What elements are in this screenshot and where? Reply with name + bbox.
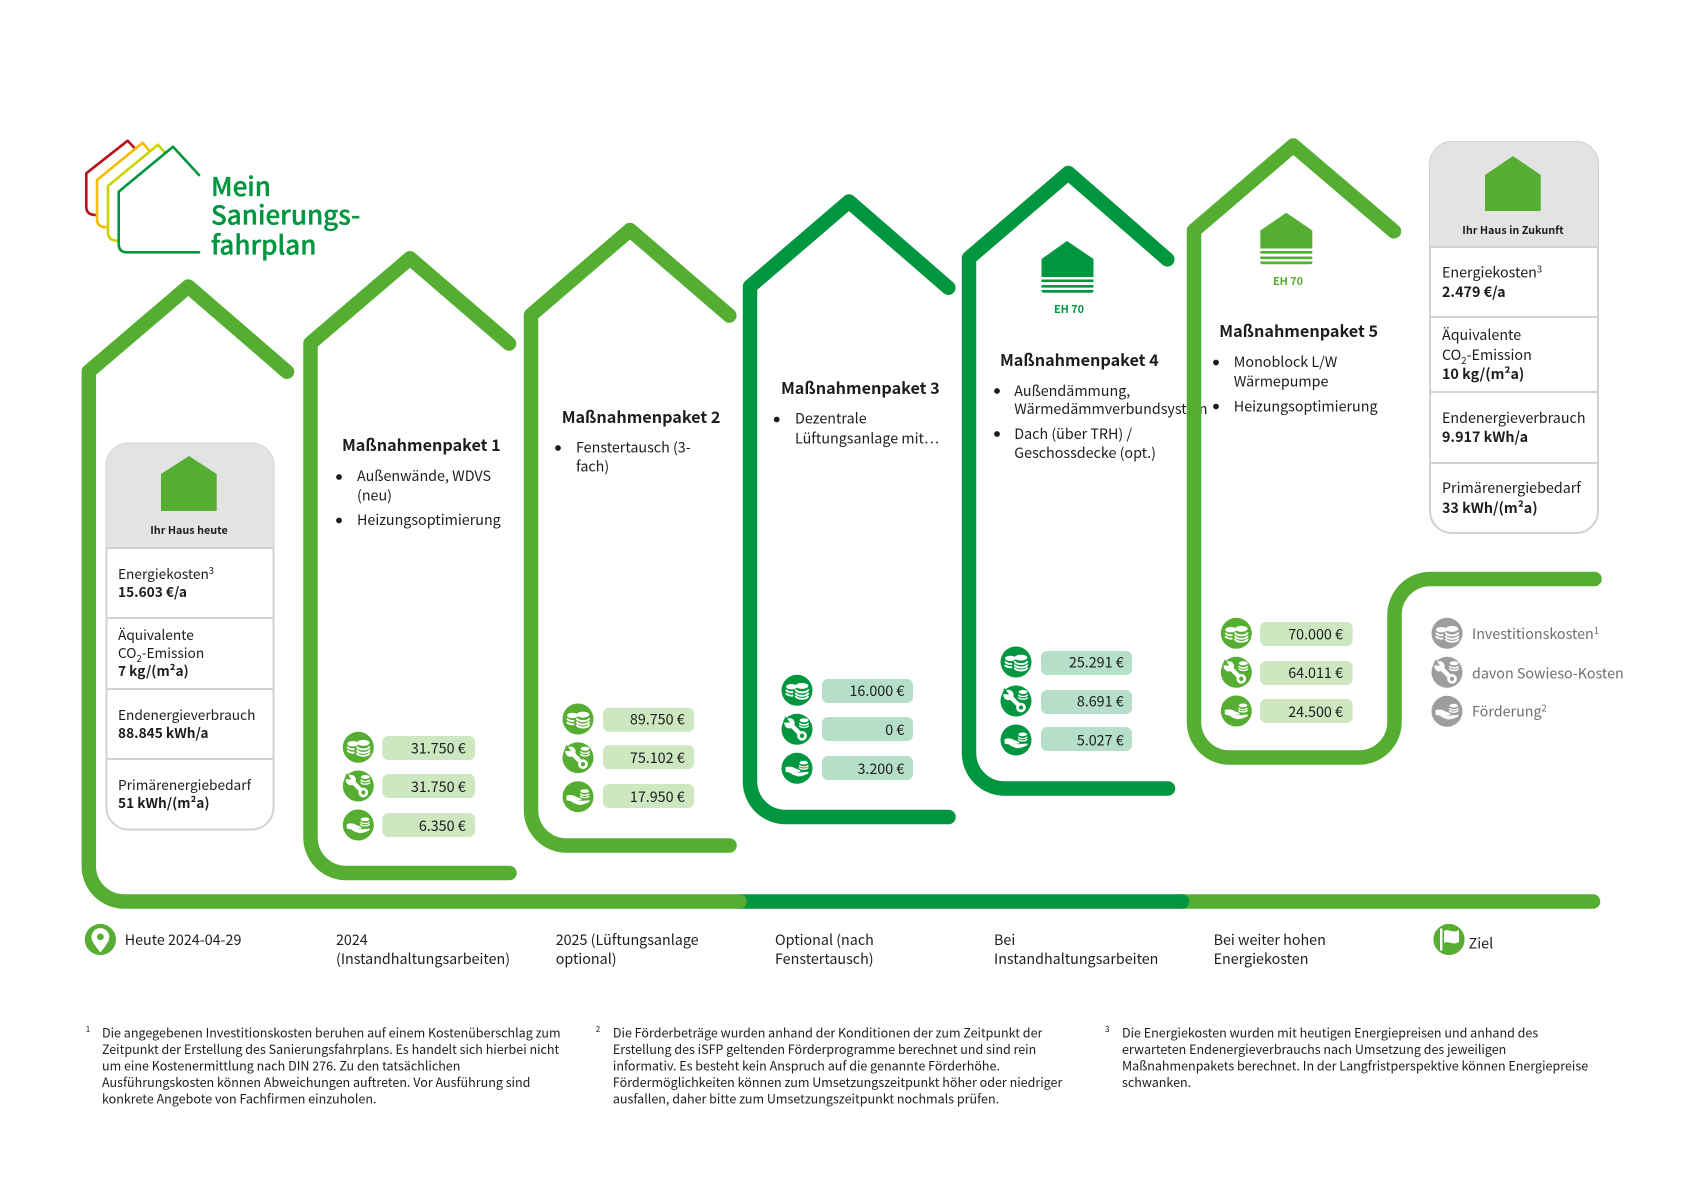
house outline: package 1 [310,258,510,873]
footnote 1: 1 [86,1024,90,1035]
title: Mein [211,167,271,204]
metric: CO2 emission: Äquivalente [1442,324,1521,345]
footnote 1: um eine Kostenermittlung nach DIN 276. Zu den tatsächlichen [102,1056,460,1075]
footnote 1 [86,1023,561,1108]
measures list: Außenwände, WDVS [357,465,491,486]
timeline label: package 4: Instandhaltungsarbeiten [994,948,1158,969]
title: fahrplan [211,226,316,262]
cost: funding [782,753,913,784]
measures list: Dach (über TRH) / [1014,423,1132,444]
footnote 1: Ausführungskosten können Abweichungen auftreten. Vor Ausführung sind [102,1072,530,1091]
icon: EH 70 house [1260,213,1312,264]
footnote 2: Fördermöglichkeiten können zum Umsetzungszeitpunkt höher oder niedriger [613,1072,1062,1091]
timeline label: package 2: optional) [556,948,617,969]
metric: primary energy: Primärenergiebedarf [118,774,252,794]
footnote 3: Maßnahmenpakets berechnet. In der Langfristperspektive können Energiepreise [1122,1056,1588,1075]
cost: investment [343,732,475,763]
cost: sowieso: 0 € [885,719,904,740]
metric: final energy: Endenergieverbrauch [118,704,255,724]
measures list [774,408,939,448]
footnote 2: Die Förderbeträge wurden anhand der Konditionen der zum Zeitpunkt der [613,1023,1043,1042]
house outline: today [89,286,740,902]
metric: energy costs [118,563,214,601]
metric: CO2 emission: CO [118,642,136,662]
timeline start marker: Heute 2024-04-29 [125,929,241,950]
panel: Maßnahmenpaket 4 [994,241,1208,756]
house outline: package 2 [531,230,730,846]
metric: energy costs: Energiekosten [118,563,209,583]
timeline label: package 1: (Instandhaltungsarbeiten) [336,948,510,969]
footnote 2: informativ. Es besteht kein Anspruch auf die genannte Förderhöhe. [613,1056,1000,1075]
metric: final energy: 88.845 kWh/a [118,722,208,742]
measures list: Dezentrale [795,408,867,428]
metric: CO2 emission [1442,324,1532,384]
metric: final energy: Endenergieverbrauch [1442,407,1586,428]
cost: investment: 25.291 € [1069,652,1124,673]
measures list: Fenstertausch (3- [576,436,691,458]
metric: final energy [1442,407,1586,447]
dividers [1430,247,1598,463]
cost: investment [1221,618,1353,649]
timeline label: package 1: 2024 [336,929,368,950]
legend [1432,618,1624,727]
metric: energy costs: 15.603 €/a [118,581,187,601]
measures list: fach) [576,456,609,476]
cost: sowieso: 8.691 € [1077,691,1124,712]
timeline: final light segment [1180,894,1593,909]
timeline label: package 5 [1214,929,1326,969]
EH 70 label: EH 70 [1273,273,1303,289]
cost: sowieso: 31.750 € [411,776,466,797]
metric: energy costs: 3 [1537,262,1542,276]
footnote 3: erwarteten Endenergieverbrauchs nach Umsetzung des jeweiligen [1122,1039,1506,1058]
cost: investment [782,675,913,706]
cost: funding: 5.027 € [1077,730,1124,751]
card label: Ihr Haus in Zukunft [1462,222,1564,238]
metric: energy costs: Energiekosten [1442,262,1537,283]
metric: final energy [118,704,255,742]
timeline label: package 1 [336,929,510,969]
metric: primary energy [118,774,252,812]
timeline goal marker: Ziel [1469,932,1493,954]
metric: energy costs: 2.479 €/a [1442,281,1506,302]
title: Sanierungs- [211,196,360,233]
metric: CO2 emission: Äquivalente [118,624,194,644]
house outline: package 5 with connector to target [1194,146,1594,758]
metric: primary energy: Primärenergiebedarf [1442,477,1582,498]
icon: house [1485,156,1541,211]
panel: Maßnahmenpaket 3 [774,375,940,784]
footnote 3: Die Energiekosten wurden mit heutigen Energiepreisen und anhand des [1122,1023,1538,1042]
timeline label: package 2: 2025 (Lüftungsanlage [556,929,699,950]
cost: funding [562,781,694,812]
timeline label: package 5: Bei weiter hohen [1214,929,1326,950]
measures list: Geschossdecke (opt.) [1014,442,1156,463]
cost: sowieso [343,770,475,802]
measures list [994,380,1208,463]
timeline start marker [85,924,241,955]
footnote 2: ausfallen, daher bitte zum Umsetzungszeitpunkt nochmals prüfen. [613,1088,999,1108]
cost: investment: 70.000 € [1288,623,1343,644]
metric: CO2 emission: -Emission [142,642,204,662]
cost: investment: 31.750 € [411,737,466,758]
legend: funding: 2 [1542,701,1547,715]
metric: energy costs: 3 [209,563,214,577]
cost: funding: 6.350 € [419,815,466,836]
heading: Maßnahmenpaket 1 [342,432,501,456]
timeline label: package 5: Energiekosten [1214,948,1308,969]
timeline goal marker [1433,924,1493,955]
footnote 1: Die angegebenen Investitionskosten beruhen auf einem Kostenüberschlag zum [102,1023,561,1042]
panel: Ihr Haus in Zukunft [1430,142,1598,533]
measures list: Lüftungsanlage mit… [795,427,939,448]
heading: Maßnahmenpaket 2 [562,404,720,428]
timeline: dark middle segment [739,894,1182,909]
house outline: package 4 [969,173,1168,788]
cost: sowieso: 75.102 € [630,747,685,768]
metric: CO2 emission [118,624,204,680]
icon: house [161,456,217,511]
icon: EH 70 house [1042,241,1094,293]
dividers [106,548,274,759]
timeline label: package 2 [556,929,699,969]
footnote 3: schwanken. [1122,1072,1191,1091]
cost: funding: 24.500 € [1288,701,1343,722]
measures list: Heizungsoptimierung [1234,395,1378,416]
timeline label: package 3 [775,929,874,969]
metric: primary energy [1442,477,1582,518]
cost: funding [1221,696,1353,726]
legend: funding [1432,696,1547,727]
footnote 2 [596,1023,1062,1108]
house outline: package 3 [750,202,948,817]
heading: Maßnahmenpaket 3 [781,375,940,399]
title [211,167,360,262]
legend: funding: Förderung [1472,701,1542,722]
panel: Maßnahmenpaket 1 [336,432,501,840]
cost: investment: 16.000 € [850,680,904,701]
footnote 2: Erstellung des iSFP geltenden Förderprogramme berechnet und sind rein [613,1039,1036,1058]
metric: CO2 emission: 10 kg/(m²a) [1442,363,1524,384]
legend: sowieso costs [1432,657,1624,688]
EH 70 label: EH 70 [1054,301,1084,317]
cost: funding: 17.950 € [630,786,685,807]
metric: CO2 emission: 7 kg/(m²a) [118,660,189,680]
legend: investment costs: Investitionskosten [1472,623,1594,644]
timeline label: package 4: Bei [994,929,1015,950]
measures list: Außendämmung, [1014,380,1130,401]
cost: investment [1000,646,1132,678]
measures list [336,465,501,530]
cost: investment: 89.750 € [630,708,685,729]
metric: CO2 emission: 2 [136,651,142,665]
cost: sowieso [1000,686,1132,716]
cost: funding [1000,724,1132,756]
measures list [1213,351,1378,416]
heading: Maßnahmenpaket 4 [1000,347,1159,371]
metric: CO2 emission: 2 [1461,353,1467,367]
metric: energy costs [1442,262,1542,302]
measures list [555,436,691,476]
footnote 1: Zeitpunkt der Erstellung des Sanierungsfahrplans. Es handelt sich hierbei nicht [102,1039,560,1058]
measures list: Wärmepumpe [1234,370,1328,392]
cost: sowieso [1221,657,1353,688]
cost: funding: 3.200 € [857,758,904,779]
measures list: Monoblock L/W [1234,351,1338,372]
heading: Maßnahmenpaket 5 [1219,318,1378,342]
footnote 1: konkrete Angebote von Fachfirmen einzuholen. [102,1088,376,1108]
measures list: (neu) [357,484,392,506]
timeline label: package 3: Fenstertausch) [775,948,874,969]
timeline label: package 4 [994,929,1158,969]
measures list: Heizungsoptimierung [357,509,501,530]
footnote 2: 2 [596,1024,601,1035]
cost: sowieso: 64.011 € [1288,662,1343,683]
panel: Maßnahmenpaket 5 [1213,213,1378,726]
legend: investment costs: 1 [1594,623,1599,637]
cost: sowieso [562,742,694,773]
legend: investment costs [1432,618,1599,649]
footnote 3 [1105,1023,1588,1091]
metric: CO2 emission: -Emission [1467,344,1532,365]
cost: funding [343,810,475,840]
panel: Maßnahmenpaket 2 [555,404,720,812]
timeline label: package 3: Optional (nach [775,929,874,950]
panel: Ihr Haus heute [106,444,274,830]
metric: primary energy: 51 kWh/(m²a) [118,792,210,812]
cost: sowieso [782,714,913,745]
metric: primary energy: 33 kWh/(m²a) [1442,497,1538,518]
card label: Ihr Haus heute [150,522,228,538]
footnote 3: 3 [1105,1024,1109,1035]
metric: final energy: 9.917 kWh/a [1442,426,1528,447]
measures list: Wärmedämmverbundsystem [1014,398,1208,419]
logo: stacked house outlines [86,141,199,252]
legend: sowieso costs: davon Sowieso-Kosten [1472,662,1624,683]
metric: CO2 emission: CO [1442,344,1461,365]
cost: investment [562,704,694,734]
